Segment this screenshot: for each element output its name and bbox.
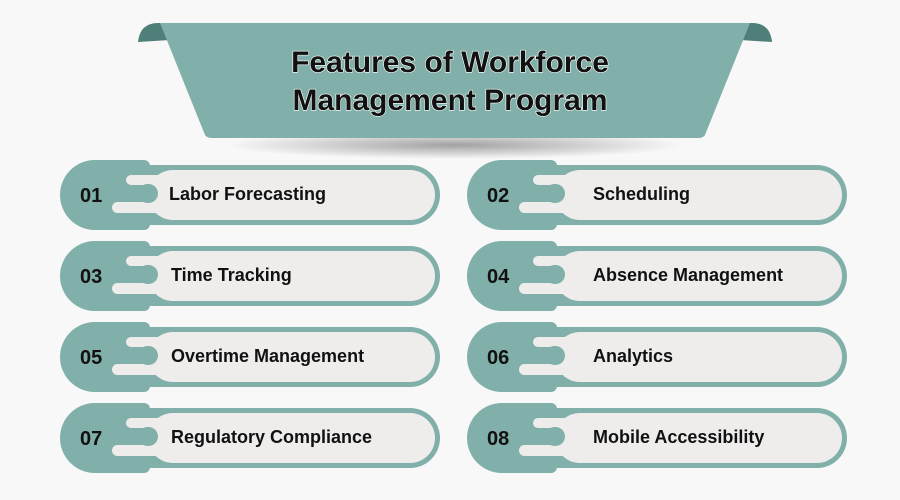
item 02 <box>467 160 847 230</box>
item 07: 07 <box>80 428 102 450</box>
item 08: Mobile Accessibility <box>593 427 764 447</box>
item 03 <box>60 241 440 311</box>
banner <box>138 23 772 159</box>
item 08 <box>467 403 847 473</box>
item 06: Analytics <box>593 346 673 366</box>
item 08: 08 <box>487 428 509 450</box>
item 01 <box>60 160 440 230</box>
item 01: Labor Forecasting <box>169 184 326 204</box>
item 04: Absence Management <box>593 265 783 285</box>
item 07 <box>60 403 440 473</box>
title: Features of Workforce <box>291 46 609 79</box>
item 04: 04 <box>487 266 510 288</box>
item 02: 02 <box>487 185 509 207</box>
item 05: 05 <box>80 347 102 369</box>
item 01: 01 <box>80 185 102 207</box>
item 03: Time Tracking <box>171 265 292 285</box>
item 05 <box>60 322 440 392</box>
item 06 <box>467 322 847 392</box>
item 02: Scheduling <box>593 184 690 204</box>
item 04 <box>467 241 847 311</box>
item 07: Regulatory Compliance <box>171 427 372 447</box>
item 03: 03 <box>80 266 102 288</box>
item 05: Overtime Management <box>171 346 364 366</box>
item 06: 06 <box>487 347 509 369</box>
banner: Management Program <box>292 84 608 117</box>
